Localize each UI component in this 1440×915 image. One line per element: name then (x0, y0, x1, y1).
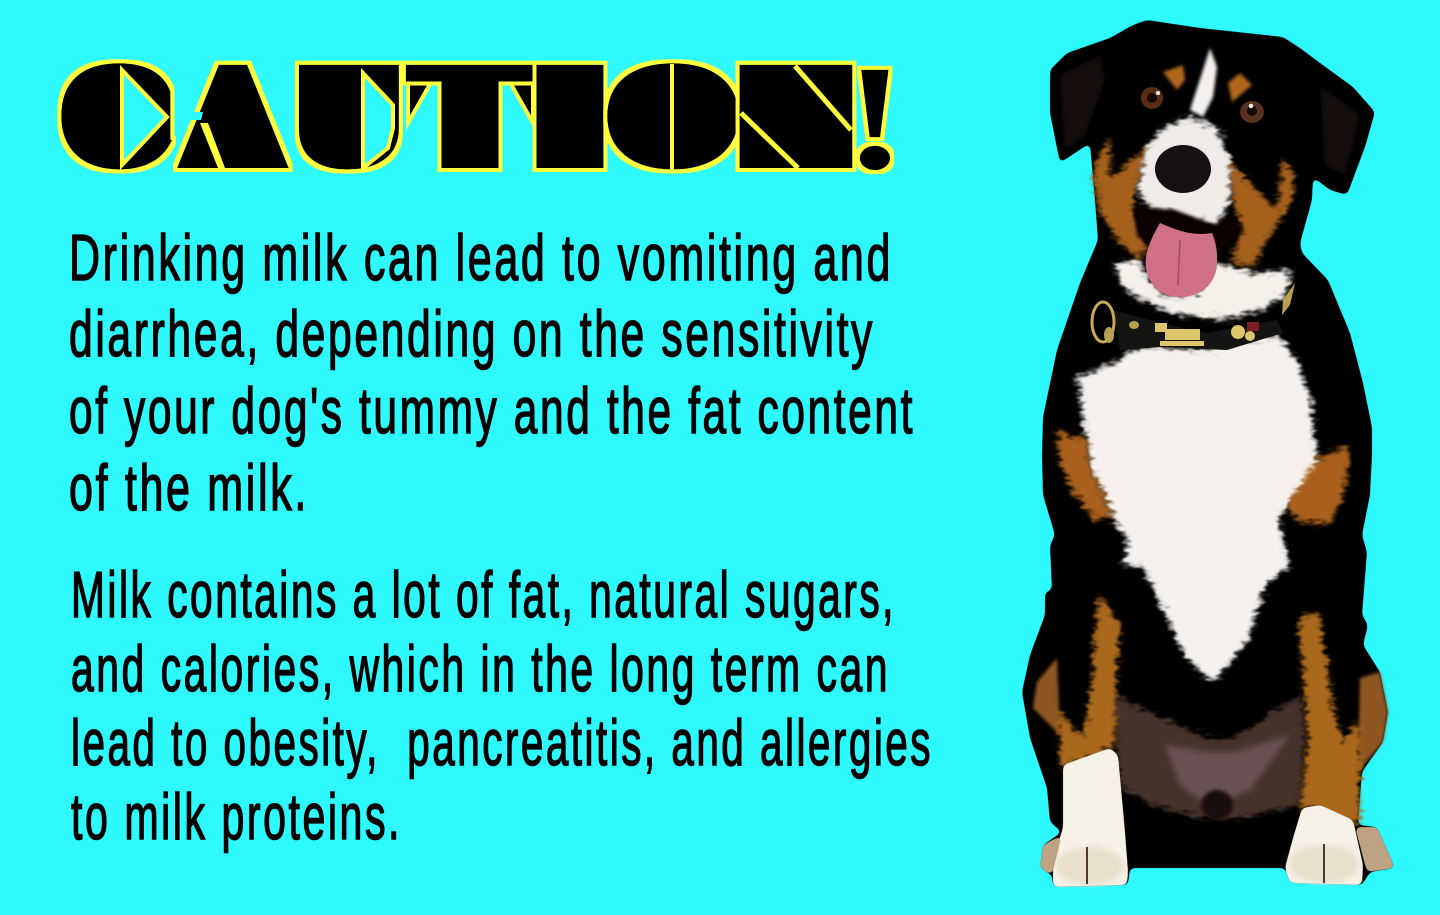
belly (1113, 695, 1305, 818)
text block: first paragraph: Drinking milk can lead to vomiting and (69, 221, 893, 294)
gold cow ornament (1155, 323, 1204, 346)
text block: second paragraph: to milk proteins. (71, 780, 402, 853)
tan cheeks (1094, 137, 1295, 267)
right foreleg (1285, 612, 1363, 885)
dog silhouette (1022, 20, 1395, 887)
white chest (1077, 333, 1320, 682)
white blaze (1190, 48, 1217, 117)
text block: first paragraph: diarrhea, depending on the sensitivity (69, 297, 875, 370)
text block: second paragraph: Milk contains a lot of fat, natural sugars, (71, 558, 896, 631)
mouth (1133, 207, 1243, 252)
title: CAUTION!: C (54, 32, 177, 200)
neck ruff (1113, 260, 1290, 320)
title: CAUTION!: ! (844, 35, 906, 201)
title: CAUTION!: U (289, 33, 409, 200)
haunches (1033, 658, 1388, 772)
text block: first paragraph: of your dog's tummy and the fat content (69, 374, 915, 447)
eyebrows (1163, 65, 1252, 102)
dog photo illustration (1022, 20, 1395, 887)
collar ring (1092, 302, 1114, 342)
title: CAUTION! (54, 32, 906, 201)
title: CAUTION!: I (505, 33, 635, 200)
title: CAUTION!: T (421, 32, 519, 200)
title: CAUTION!: N (727, 32, 865, 200)
left foreleg (1053, 595, 1128, 887)
back paws (1040, 827, 1395, 875)
collar (1092, 283, 1295, 350)
text block: first paragraph (69, 221, 915, 524)
tan chest patches (1057, 430, 1350, 525)
title: CAUTION!: A (173, 33, 293, 200)
text block: first paragraph: of the milk. (69, 451, 309, 524)
nose (1155, 145, 1211, 193)
neck studs (1104, 283, 1295, 343)
tongue (1146, 223, 1217, 297)
ears shading (1060, 55, 1360, 175)
text block: second paragraph: lead to obesity, pancreatitis, and allergies (71, 706, 933, 779)
text block: second paragraph (71, 558, 933, 853)
eyes (1141, 87, 1264, 123)
title: CAUTION!: O (599, 33, 747, 201)
text block: second paragraph: and calories, which in the long term can (71, 632, 890, 705)
muzzle (1137, 117, 1230, 227)
gold flower ornament (1231, 322, 1259, 341)
